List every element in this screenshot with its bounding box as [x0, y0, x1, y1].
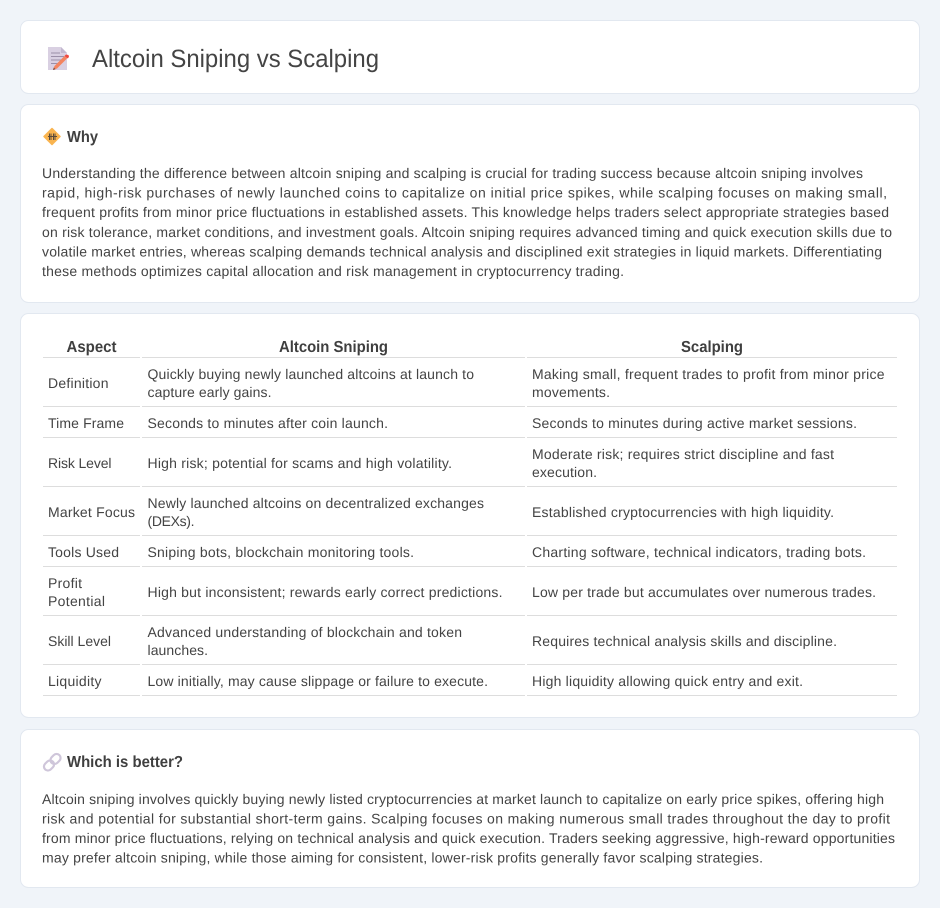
row: profit potential: High but inconsistent; rewards early correct predictions.: [148, 584, 502, 600]
table header: [66, 339, 743, 356]
icon: memo with pencil: [48, 47, 69, 70]
text block: which paragraph: risk and potential for substantial short-term gains. Scalping focuses on making numerous small trades throughout the day to profit: [42, 810, 890, 826]
text block: why paragraph: [42, 165, 892, 279]
row: profit potential: Potential: [48, 593, 105, 609]
row: tools used: Tools Used: [48, 544, 119, 560]
row: liquidity: [48, 673, 803, 689]
row: liquidity: Liquidity: [48, 673, 102, 689]
table header: Aspect: [66, 339, 117, 356]
heading: why: Why: [67, 129, 98, 146]
row: profit potential: [48, 575, 876, 609]
row: risk level: Moderate risk; requires strict discipline and fast: [532, 446, 834, 462]
text block: why paragraph: volatile market entries, whereas scalping demands technical analysis and disciplined exit strategies in liquid markets. Differentiating: [42, 244, 882, 260]
row: time frame: Seconds to minutes after coin launch.: [148, 415, 388, 431]
row: market focus: Newly launched altcoins on decentralized exchanges: [148, 495, 484, 511]
panel: which is better: [20, 730, 920, 888]
row: skill level: Requires technical analysis skills and discipline.: [532, 633, 837, 649]
table header: Scalping: [681, 339, 743, 356]
row: time frame: Seconds to minutes during active market sessions.: [532, 415, 857, 431]
row: definition: capture early gains.: [148, 384, 272, 400]
row: profit potential: Profit: [48, 575, 82, 591]
row: market focus: [48, 495, 834, 529]
icon: warning diamond: [44, 128, 60, 144]
row: definition: Making small, frequent trades to profit from minor price: [532, 366, 885, 382]
row: definition: Definition: [48, 375, 108, 391]
row: skill level: [48, 624, 837, 658]
icon: link: [42, 752, 62, 772]
row: liquidity: High liquidity allowing quick entry and exit.: [532, 673, 803, 689]
row: market focus: Established cryptocurrencies with high liquidity.: [532, 504, 834, 520]
text block: which paragraph: [42, 791, 895, 866]
row: definition: Quickly buying newly launched altcoins at launch to: [148, 366, 474, 382]
row: risk level: execution.: [532, 464, 597, 480]
row: risk level: High risk; potential for scams and high volatility.: [148, 455, 452, 471]
title: Altcoin Sniping vs Scalping: [92, 45, 379, 73]
panel: comparison table: [20, 314, 920, 718]
text block: why paragraph: these methods optimizes capital allocation and risk management in cryptocurrency trading.: [42, 263, 624, 279]
row: tools used: Sniping bots, blockchain monitoring tools.: [148, 544, 414, 560]
heading: which is better: Which is better?: [67, 754, 183, 771]
row: risk level: [48, 446, 834, 480]
text block: which paragraph: from minor price fluctuations, relying on technical analysis and quick execution. Traders seeking aggressive, high-reward opportunities: [42, 830, 895, 846]
panel: why: [20, 104, 920, 302]
row: skill level: Skill Level: [48, 633, 111, 649]
panel: title header: [20, 20, 920, 94]
row: time frame: [48, 415, 857, 431]
row: market focus: Market Focus: [48, 504, 135, 520]
text block: why paragraph: rapid, high-risk purchases of newly launched coins to capitalize on initial price spikes, while scalping focuses on making small,: [42, 184, 887, 200]
row: profit potential: Low per trade but accumulates over numerous trades.: [532, 584, 876, 600]
row: definition: [48, 366, 885, 400]
row: tools used: Charting software, technical indicators, trading bots.: [532, 544, 866, 560]
row: skill level: Advanced understanding of blockchain and token: [148, 624, 462, 640]
row: skill level: launches.: [148, 642, 208, 658]
row: risk level: Risk Level: [48, 455, 112, 471]
text block: why paragraph: Understanding the difference between altcoin sniping and scalping is crucial for trading success because altcoin sniping involves: [42, 165, 863, 181]
text block: why paragraph: frequent profits from minor price fluctuations in established assets. This knowledge helps traders select appropriate strategies based: [42, 204, 889, 220]
row: liquidity: Low initially, may cause slippage or failure to execute.: [148, 673, 488, 689]
text block: why paragraph: on risk tolerance, market conditions, and investment goals. Altcoin sniping requires advanced timing and quick execution skills due to: [42, 224, 892, 240]
text block: which paragraph: Altcoin sniping involves quickly buying newly listed cryptocurrencies at market launch to capitalize on early price spikes, offering high: [42, 791, 884, 807]
text block: which paragraph: may prefer altcoin sniping, while those aiming for consistent, lower-risk profits generally favor scalping strategies.: [42, 850, 763, 866]
table header: Altcoin Sniping: [279, 339, 388, 356]
row: market focus: (DEXs).: [148, 513, 194, 529]
row: definition: movements.: [532, 384, 610, 400]
row: tools used: [48, 544, 866, 560]
row: time frame: Time Frame: [48, 415, 124, 431]
